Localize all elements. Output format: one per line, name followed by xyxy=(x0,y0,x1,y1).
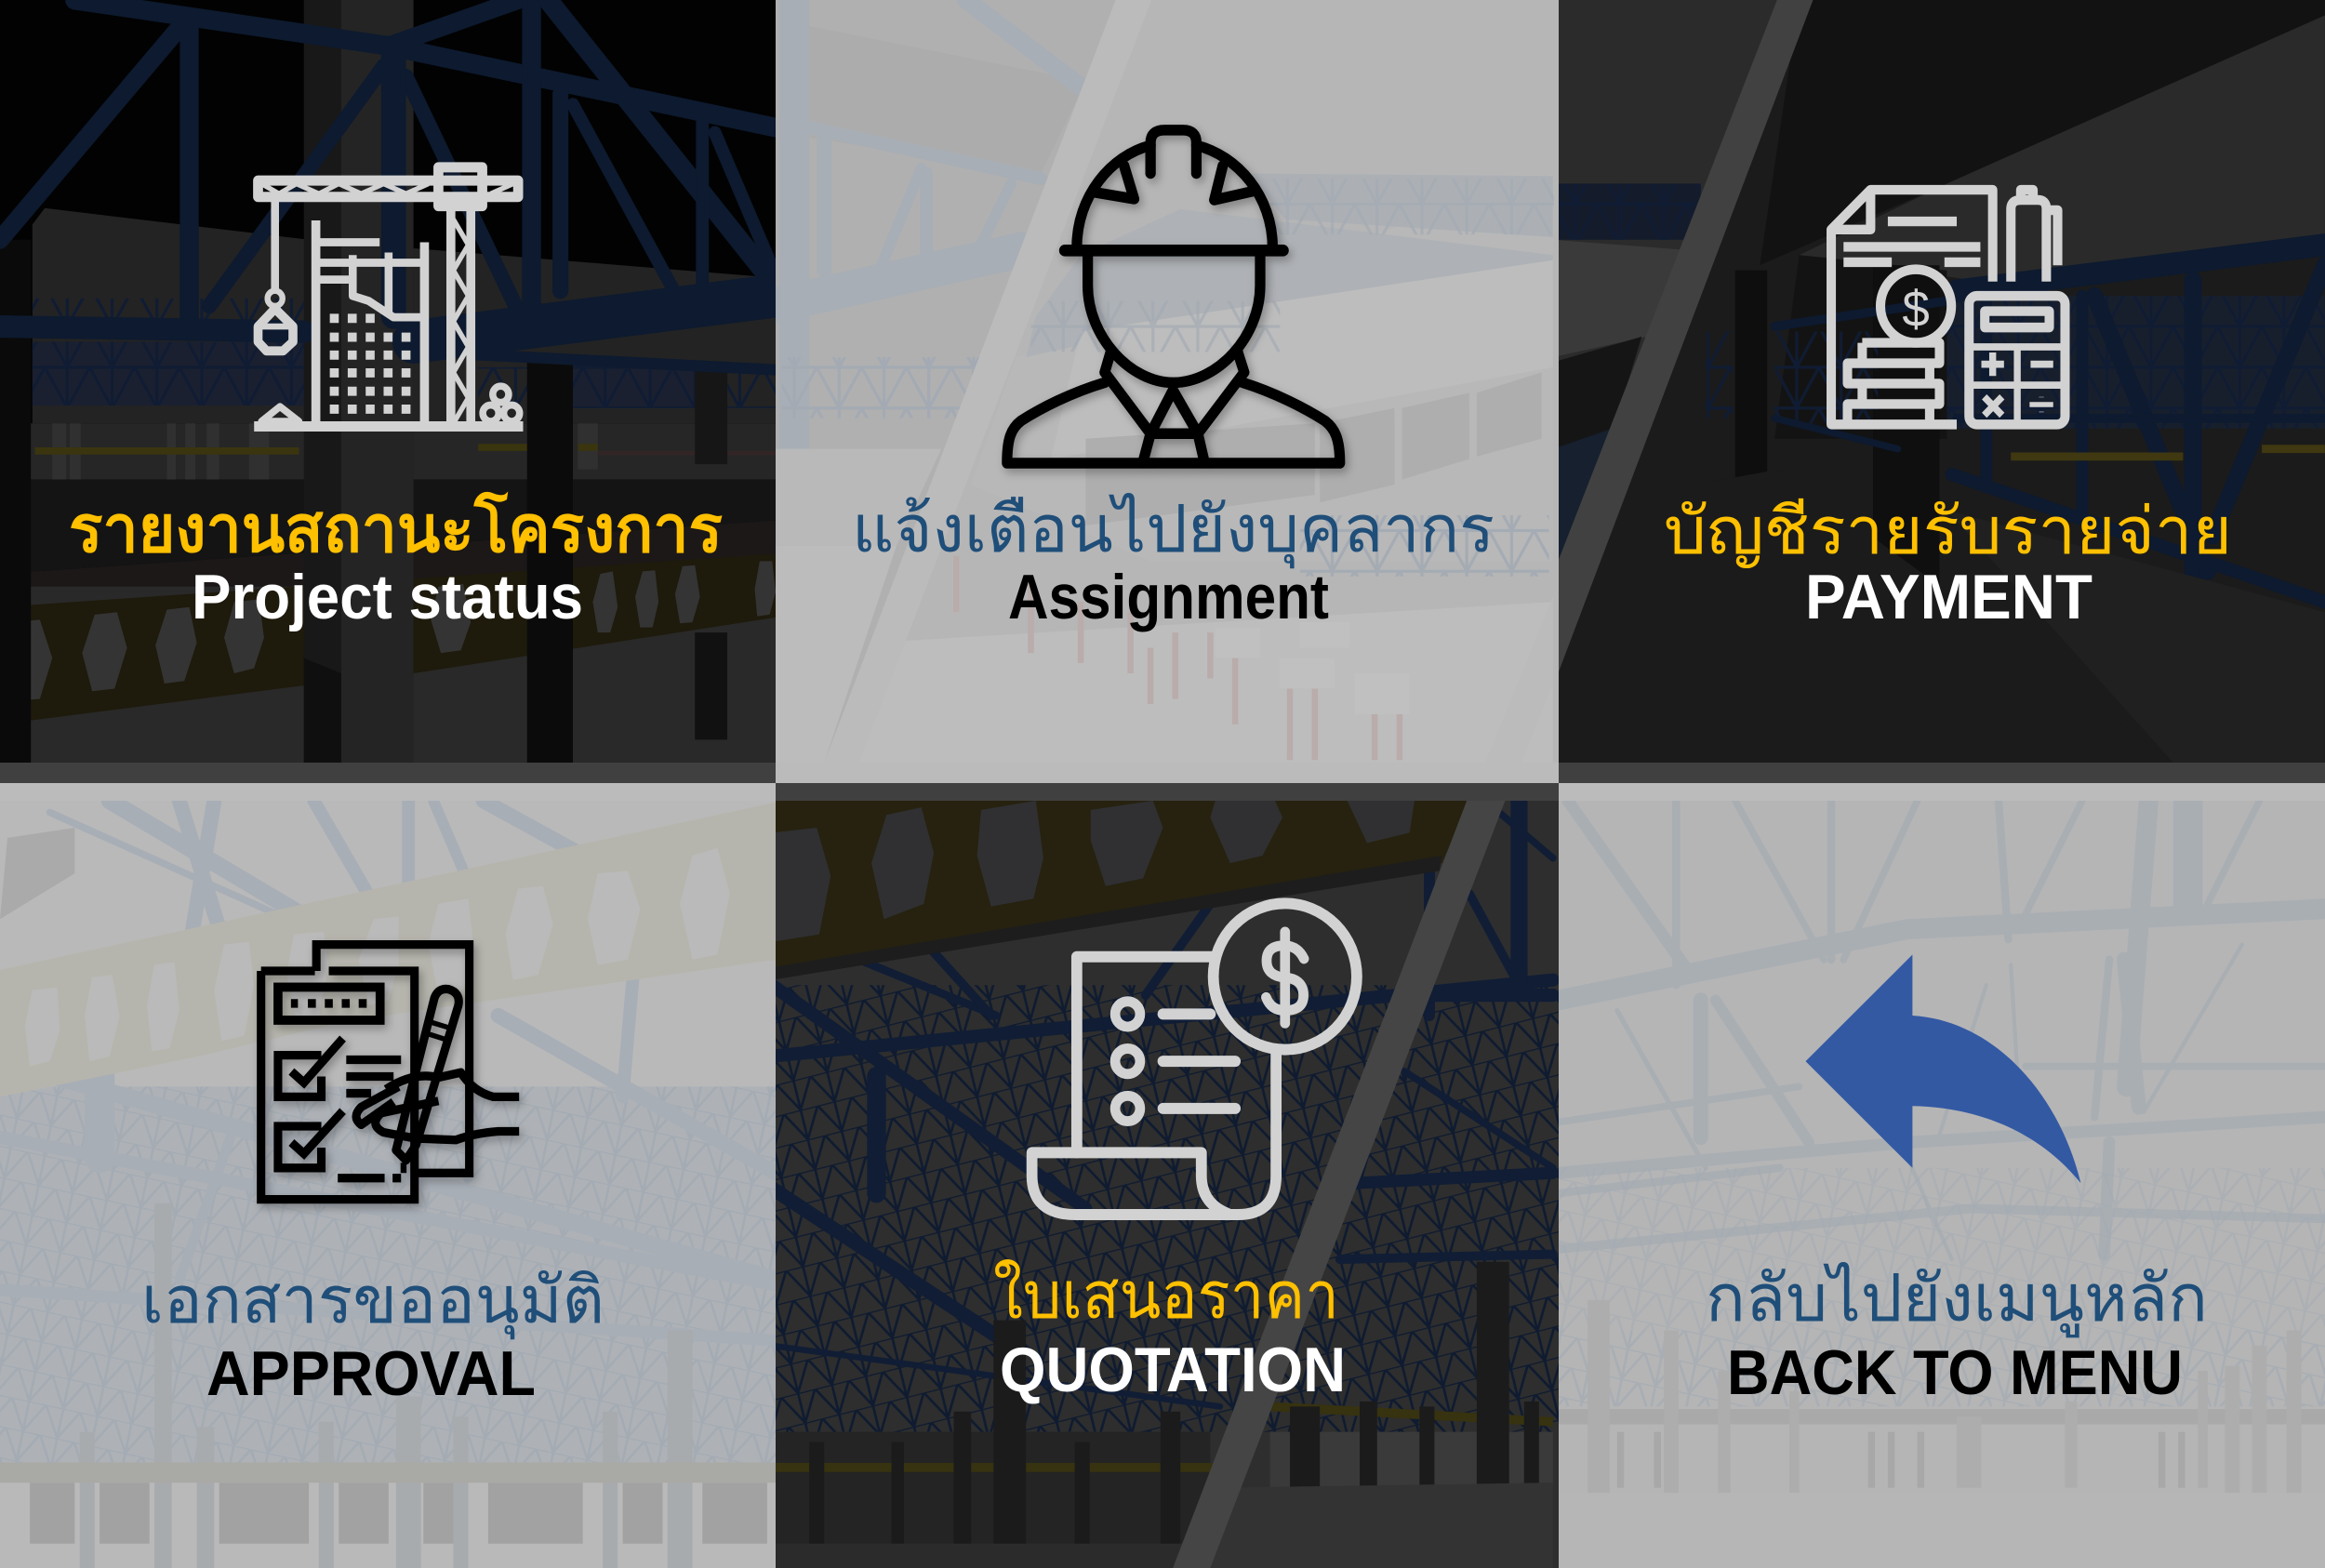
panel: quotation xyxy=(772,783,1569,1568)
heading: approval english: APPROVAL xyxy=(206,1338,536,1409)
strip: quotation header xyxy=(776,783,1559,801)
strip: back to menu header xyxy=(1559,783,2325,801)
icon: invoice, coins, calculator: $ xyxy=(1902,281,1930,338)
icon: tower crane and building xyxy=(254,167,523,427)
icon: checklist with hand and pen xyxy=(261,945,519,1200)
heading: back to menu english: BACK TO MENU xyxy=(1727,1337,2183,1408)
panel: back to menu xyxy=(1553,783,2325,1568)
heading: project status english: Project status xyxy=(192,562,583,632)
panel: approval xyxy=(0,783,797,1568)
strip: assignment footer xyxy=(776,763,1559,783)
strip: payment footer xyxy=(1559,763,2325,783)
panel: payment xyxy=(1553,0,2325,783)
panel: project status xyxy=(0,0,797,783)
icon: back arrow xyxy=(1806,955,2080,1183)
icon: construction worker with helmet xyxy=(1007,130,1340,463)
background: dark interior structure xyxy=(1559,0,2325,763)
strip: project status footer xyxy=(0,763,776,783)
heading: payment thai: บัญชีรายรับรายจ่าย xyxy=(1664,495,2232,568)
heading: project status thai: รายงานสถานะโครงการ xyxy=(69,491,723,565)
heading: quotation english: QUOTATION xyxy=(1000,1335,1346,1405)
background: dark roof trusses xyxy=(776,801,1559,1568)
heading: back to menu thai: กลับไปยังเมนูหลัก xyxy=(1706,1262,2208,1338)
icon: invoice, coins, calculator xyxy=(1831,190,2065,424)
background: pale roof trusses xyxy=(1559,801,2325,1568)
strip: approval header xyxy=(0,783,776,801)
heading: payment english: PAYMENT xyxy=(1805,562,2092,632)
heading: assignment thai: แจ้งเตือนไปยังบุคลากร xyxy=(852,493,1495,569)
heading: assignment english: Assignment xyxy=(1008,562,1329,632)
background: dark steel structure xyxy=(0,0,776,763)
panel: assignment xyxy=(772,0,1569,783)
icon: invoice scroll with dollar coin xyxy=(1032,903,1357,1215)
heading: quotation thai: ใบเสนอราคา xyxy=(993,1258,1339,1332)
heading: approval thai: เอกสารขออนุมัติ xyxy=(141,1264,604,1340)
background: light roof trusses xyxy=(0,801,776,1568)
background: light steel structure xyxy=(776,0,1559,763)
